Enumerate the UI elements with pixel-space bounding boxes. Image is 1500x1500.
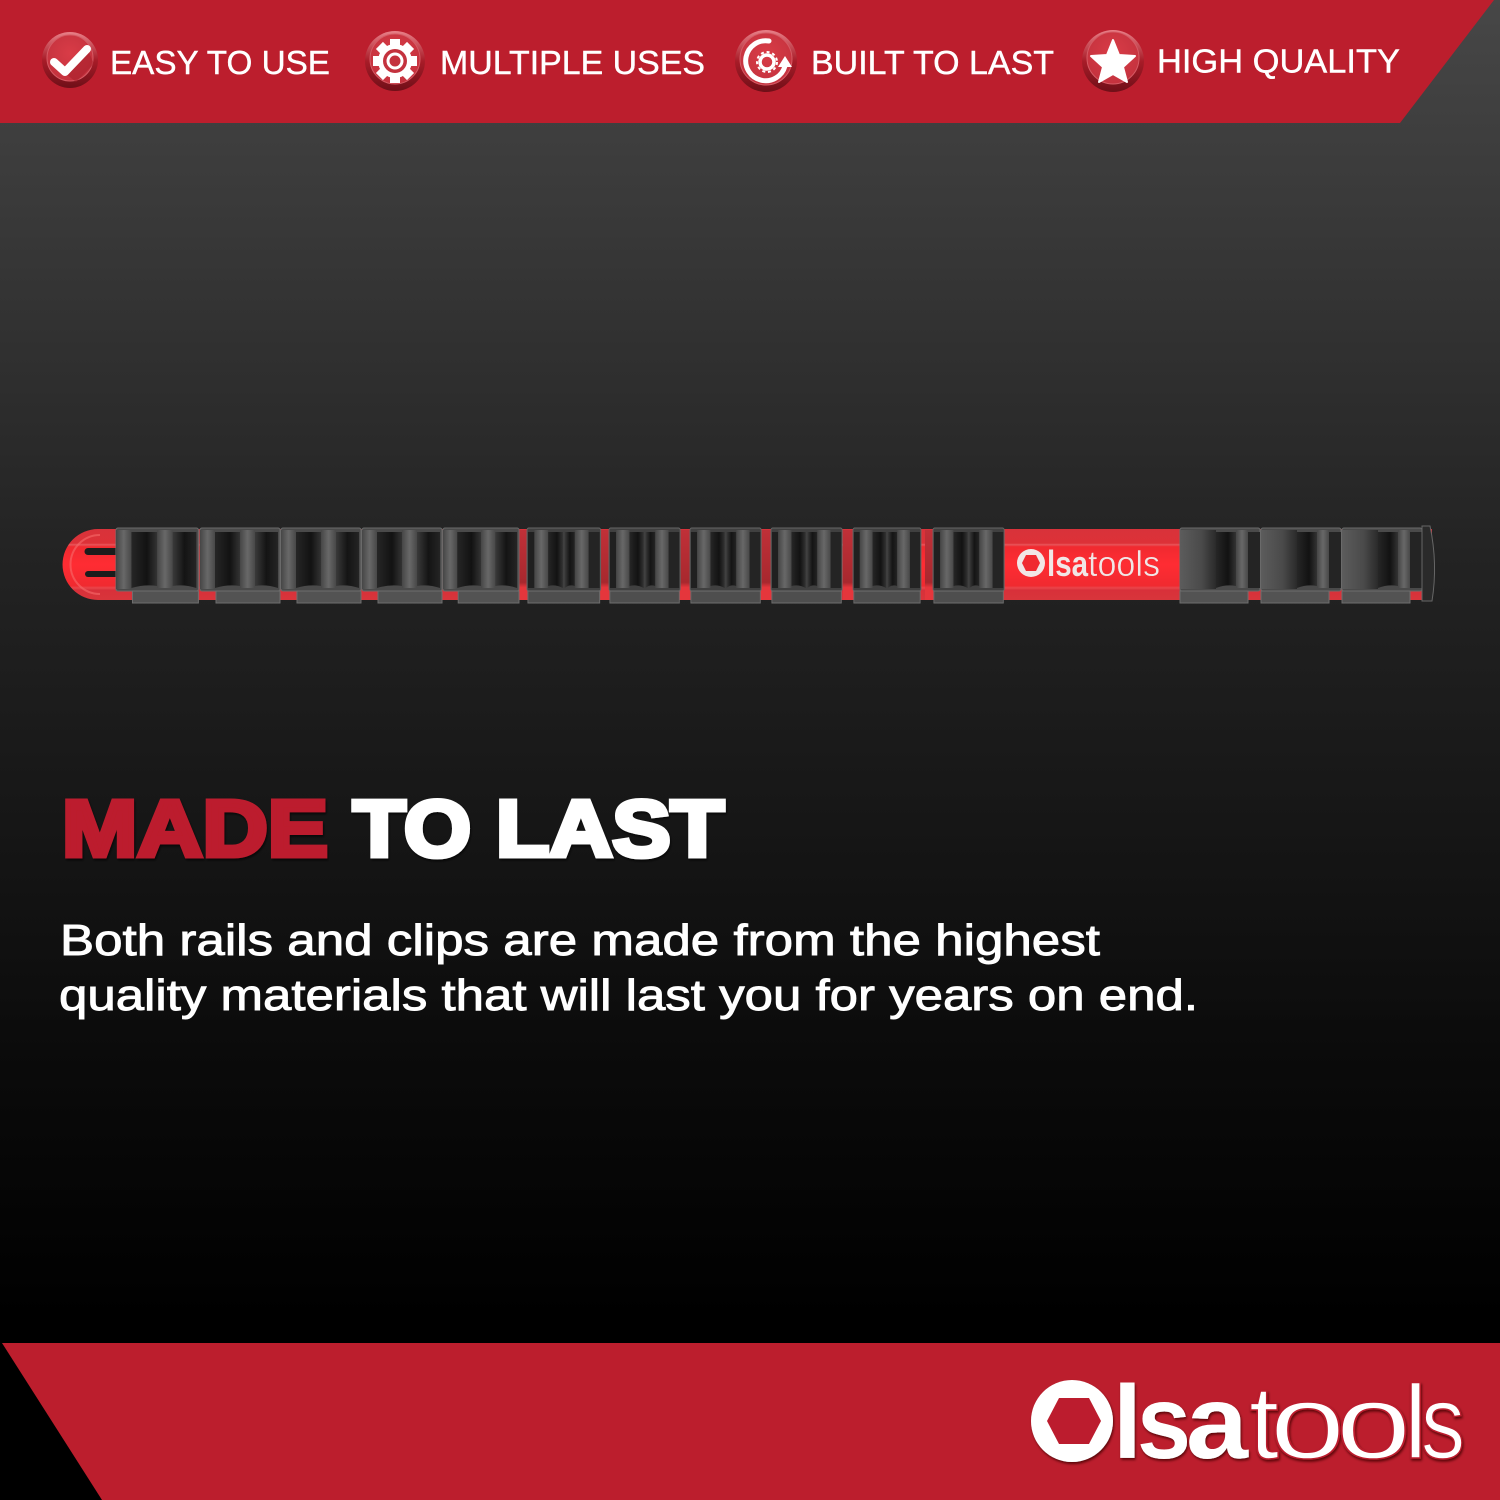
heading: made to last xyxy=(62,784,724,873)
brand logo: s xyxy=(1421,1365,1465,1481)
rail logo: O xyxy=(1018,543,1044,584)
rail end highlight xyxy=(70,535,100,594)
bottom banner xyxy=(2,1343,1500,1500)
brand logo xyxy=(1031,1365,1465,1481)
body text: quality materials that will last you for years on end. xyxy=(59,971,1198,1020)
brand logo: O xyxy=(1035,1365,1110,1481)
product: socket rail with clips xyxy=(63,526,1435,603)
heading: made to last: LAST xyxy=(496,784,724,873)
brand logo: o xyxy=(1336,1365,1411,1481)
rail end slots xyxy=(85,548,118,577)
icon: circular arrow gear badge xyxy=(735,30,797,92)
rail gap strips xyxy=(519,530,933,600)
rail logo: tools xyxy=(1088,543,1160,584)
label: multiple uses: MULTIPLE USES xyxy=(440,44,705,81)
brand logo: l xyxy=(1113,1365,1142,1481)
label: easy to use: EASY TO USE xyxy=(110,44,330,81)
body text: Both rails and clips are made from the highest xyxy=(60,916,1100,965)
icon: gear badge xyxy=(365,31,425,91)
brand logo: a xyxy=(1186,1365,1249,1481)
brand logo: t xyxy=(1249,1365,1279,1481)
heading: made to last: MADE xyxy=(62,784,328,873)
brand logo: o xyxy=(1270,1365,1345,1481)
top banner xyxy=(0,0,1494,123)
rail logo: lsa xyxy=(1047,543,1089,584)
feature: easy to use xyxy=(42,32,330,88)
heading: made to last: TO xyxy=(353,784,471,873)
clip row xyxy=(116,528,1422,603)
feature: multiple uses xyxy=(365,31,705,91)
brand logo: l xyxy=(1404,1365,1427,1481)
feature: built to last xyxy=(735,30,1054,92)
label: high quality: HIGH QUALITY xyxy=(1157,42,1400,80)
brand logo: s xyxy=(1137,1365,1191,1481)
red rail body xyxy=(63,529,1432,600)
rail logo xyxy=(1017,543,1160,584)
rail end cap xyxy=(1422,526,1435,601)
body text xyxy=(59,916,1198,1020)
label: built to last: BUILT TO LAST xyxy=(811,44,1054,81)
icon: star badge xyxy=(1082,30,1144,92)
icon: check mark badge xyxy=(42,32,98,88)
feature: high quality xyxy=(1082,30,1400,92)
